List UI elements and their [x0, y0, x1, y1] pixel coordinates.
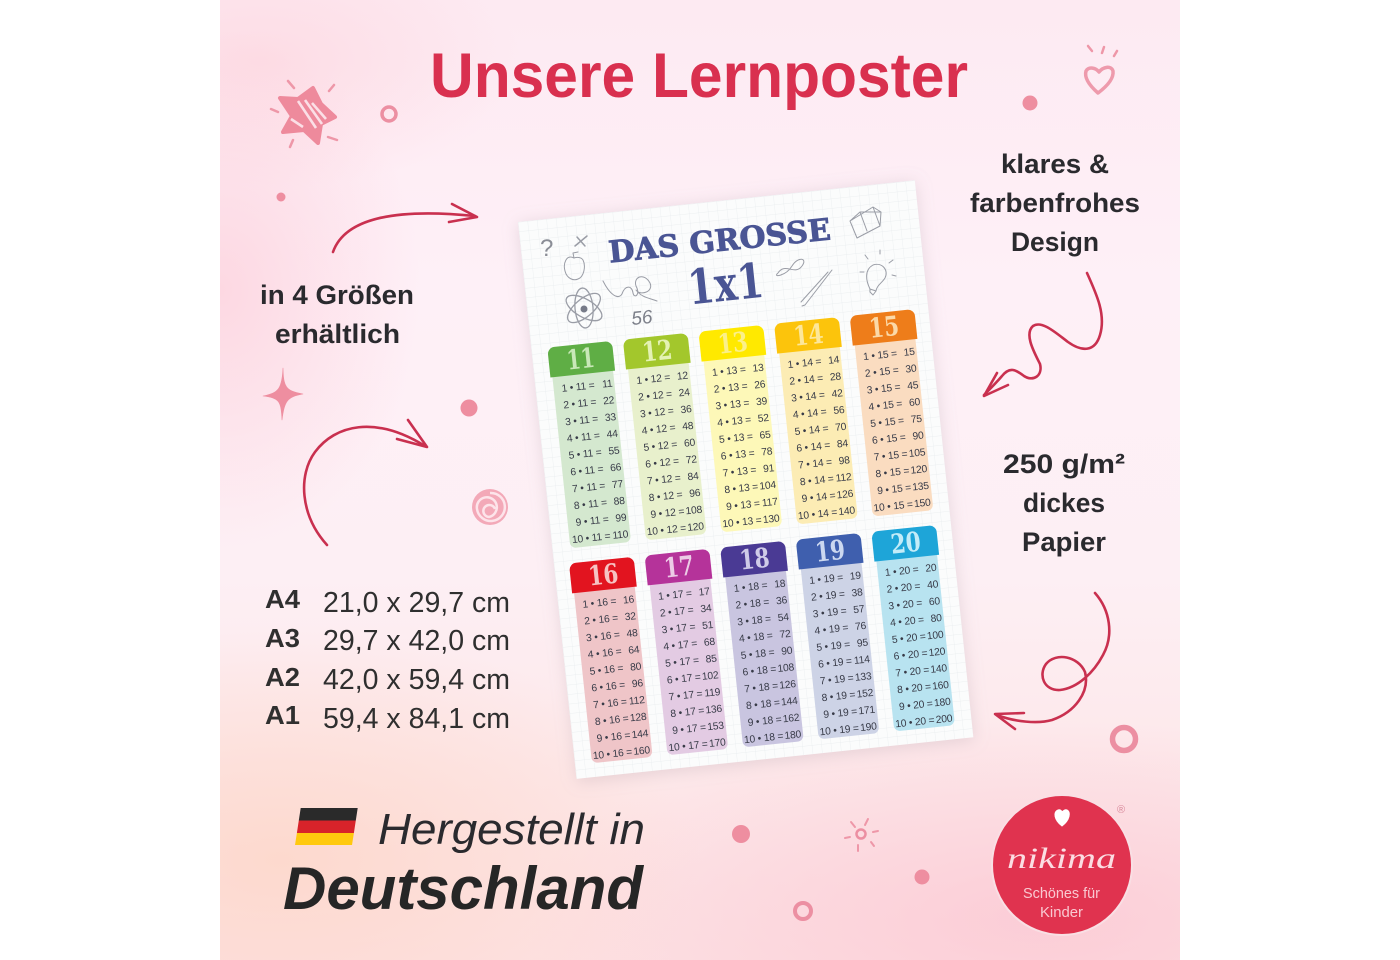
column 13: 6 • 13 =: [720, 448, 755, 463]
logo: nikima: Kinder: [1040, 905, 1083, 921]
column 13: 10 • 13 =: [722, 515, 762, 530]
column 11: 88: [613, 496, 626, 508]
column 17: 51: [702, 620, 714, 632]
column 13: 3 • 13 =: [715, 398, 750, 413]
text: in 4 Größen erhältlich: erhältlich: [275, 319, 400, 349]
icon: small ring: [382, 107, 396, 121]
column 19: 7 • 19 =: [819, 673, 854, 688]
doodle: atom: [562, 287, 606, 329]
column 17: 17: [698, 586, 711, 599]
column 15: 9 • 15 =: [877, 483, 912, 497]
column 18: 18: [738, 543, 771, 577]
column 16: 128: [629, 712, 647, 724]
column 17: 8 • 17 =: [670, 706, 705, 720]
column 12: 10 • 12 =: [646, 523, 687, 538]
column 12: 72: [685, 454, 698, 466]
column 16: 80: [630, 661, 642, 674]
column 17: 119: [704, 687, 721, 700]
column 14: 56: [833, 405, 846, 417]
arrow: top left: [333, 204, 477, 252]
column 15: 120: [910, 464, 928, 477]
column 19: 19: [814, 535, 847, 569]
column 12: 120: [687, 521, 705, 534]
column 11: 5 • 11 =: [568, 447, 602, 462]
column 11: 4 • 11 =: [566, 431, 601, 445]
column 16: 48: [626, 628, 639, 640]
column 19: 10 • 19 =: [819, 723, 860, 738]
icon: sun: [845, 819, 878, 851]
column 18: 7 • 18 =: [744, 681, 779, 695]
column 15: 7 • 15 =: [873, 449, 908, 464]
column 13: 130: [762, 513, 780, 526]
column 14: 5 • 14 =: [794, 424, 829, 438]
icon: ring: [795, 903, 811, 919]
column 18: 5 • 18 =: [740, 647, 775, 662]
column 19: 3 • 19 =: [812, 606, 847, 620]
column 18: 1 • 18 =: [733, 580, 768, 595]
column 13: 65: [759, 430, 772, 442]
text: poster sizes: A2: [265, 662, 300, 692]
text: 250 g/m² dickes Papier: 250 g/m²: [1003, 449, 1125, 479]
column 13: 9 • 13 =: [726, 499, 761, 513]
column 11: 8 • 11 =: [573, 498, 608, 512]
icon: german flag: [295, 808, 358, 845]
column 11: 44: [606, 429, 619, 441]
column 20: 180: [933, 697, 952, 709]
column 18: 108: [777, 662, 795, 675]
column 14: 2 • 14 =: [789, 373, 824, 388]
column 16: 9 • 16 =: [596, 730, 631, 745]
column 19: 171: [858, 705, 876, 717]
logo: nikima: Schönes für: [1023, 886, 1100, 902]
column 17: 4 • 17 =: [663, 639, 698, 653]
column 18: 144: [781, 696, 799, 709]
text: klares und farbenfrohes Design: Design: [1011, 227, 1099, 257]
column 16: 16: [623, 594, 635, 607]
text: poster sizes: 59,4 x 84,1 cm: [323, 703, 510, 735]
arrow: wavy: [984, 273, 1102, 396]
column 18: 54: [777, 612, 790, 624]
column 11: 110: [612, 529, 629, 542]
poster title: [607, 212, 838, 324]
column 13: 104: [759, 480, 777, 493]
column 13: 78: [761, 446, 773, 458]
column 14: 112: [835, 472, 853, 485]
column 14: 126: [836, 489, 854, 501]
text: in 4 Größen erhältlich: in 4 Größen: [260, 280, 414, 310]
column 19: 5 • 19 =: [816, 640, 851, 654]
column 15: 90: [912, 430, 925, 443]
column 12: 12: [641, 335, 674, 369]
column 11: 77: [611, 479, 624, 491]
column 20: 60: [928, 596, 941, 608]
column 13: 13: [752, 363, 765, 375]
column 19: 38: [851, 587, 864, 599]
column 17: 170: [708, 737, 727, 750]
doodle: infinity: [777, 259, 804, 276]
column 16: 64: [628, 645, 640, 657]
doodle: number 56: 56: [630, 307, 654, 330]
column 20: 100: [926, 630, 945, 642]
column 12: 24: [678, 387, 691, 399]
column 19: 133: [854, 671, 872, 684]
column 11: [547, 341, 633, 549]
column 16: 32: [624, 611, 637, 623]
arrow: loop: [995, 593, 1109, 729]
column 17: 7 • 17 =: [668, 689, 703, 703]
column 12: 3 • 12 =: [639, 406, 674, 420]
column 15: 6 • 15 =: [872, 432, 906, 447]
column 14: 14: [792, 319, 825, 353]
text: Deutschland: Deutschland: [283, 855, 644, 922]
column 20: 40: [927, 579, 939, 591]
column 11: 99: [615, 513, 628, 525]
column 18: 9 • 18 =: [747, 714, 782, 729]
text: in 4 Größen erhältlich: [260, 280, 414, 349]
logo: nikima: [992, 795, 1132, 935]
icon: spiral: [472, 489, 508, 525]
column 16: 3 • 16 =: [586, 630, 621, 644]
column 14: 140: [838, 505, 856, 518]
column 18: 3 • 18 =: [737, 614, 772, 628]
column 19: 9 • 19 =: [823, 707, 858, 721]
column 14: 10 • 14 =: [797, 507, 838, 522]
icon: dot: [732, 825, 750, 843]
icon: dot: [1022, 96, 1038, 110]
column 17: 153: [707, 721, 725, 733]
column 14: 1 • 14 =: [787, 357, 822, 371]
column 16: 2 • 16 =: [584, 613, 619, 628]
text: poster sizes: 21,0 x 29,7 cm: [323, 587, 510, 619]
column 16: 160: [633, 745, 651, 758]
text: 250 g/m² dickes Papier: dickes: [1023, 488, 1105, 518]
text: poster sizes: A3: [265, 623, 300, 653]
column 20: 4 • 20 =: [890, 615, 925, 629]
column 17: 68: [703, 637, 716, 649]
column 12: 1 • 12 =: [636, 372, 671, 387]
column 18: 36: [775, 595, 788, 607]
icon: dot: [276, 192, 286, 202]
column 15: 45: [907, 380, 919, 392]
column 14: 6 • 14 =: [796, 440, 831, 455]
poster shadow: [518, 182, 974, 782]
column 20: 160: [932, 680, 950, 693]
column 18: 8 • 18 =: [746, 698, 780, 712]
column 20: 6 • 20 =: [893, 648, 928, 663]
doodle: question mark and cross: [540, 235, 587, 262]
column 13: [698, 325, 784, 533]
column 12: 36: [680, 404, 693, 416]
column 13: 2 • 13 =: [713, 381, 748, 396]
column 14: 84: [836, 438, 849, 451]
column 17: 17: [662, 551, 696, 585]
column 15: 105: [908, 447, 926, 460]
column 13: 117: [761, 497, 779, 509]
column 14: 8 • 14 =: [799, 474, 834, 488]
text: poster sizes: A1: [265, 700, 300, 730]
column 11: 66: [610, 462, 622, 474]
column 18: 90: [781, 646, 793, 658]
column 19: 190: [860, 721, 878, 734]
doodle: scribble: [603, 277, 657, 301]
column 18: 180: [784, 729, 802, 742]
column 20: 7 • 20 =: [895, 665, 930, 680]
column 14: 7 • 14 =: [798, 457, 833, 472]
text: 250 g/m² dickes Papier: [1003, 449, 1125, 557]
column 18: 4 • 18 =: [739, 631, 773, 645]
column 12: 2 • 12 =: [638, 389, 673, 404]
logo: nikima: nikima: [1007, 842, 1116, 875]
column 13: 8 • 13 =: [724, 482, 759, 496]
column 14: 28: [829, 371, 842, 384]
column 16: 112: [628, 695, 646, 708]
text: Hergestellt in: Hergestellt in: [378, 805, 645, 854]
column 20: 20: [925, 563, 938, 575]
column 13: 52: [757, 413, 770, 425]
column 17: 1 • 17 =: [658, 588, 693, 603]
column 11: 22: [603, 395, 615, 407]
arrow: curved to the poster: [304, 420, 427, 545]
column 18: 18: [774, 579, 786, 591]
column 15: 5 • 15 =: [870, 416, 905, 430]
poster title: 1x1: [685, 253, 766, 316]
icon: doodle star: [271, 81, 337, 147]
text: poster sizes: [265, 584, 510, 735]
column 12: 60: [684, 438, 696, 450]
column 17: 102: [701, 670, 720, 683]
column 13: 1 • 13 =: [712, 365, 746, 379]
column 20: 140: [930, 663, 948, 676]
column 12: 4 • 12 =: [641, 423, 676, 437]
column 17: 3 • 17 =: [661, 622, 696, 636]
doodle: pencil: [801, 270, 832, 306]
column 14: [774, 317, 860, 525]
column 16: 6 • 16 =: [591, 680, 626, 695]
column 20: 1 • 20 =: [884, 565, 919, 579]
background panel: [220, 0, 1180, 960]
column 20: 9 • 20 =: [898, 699, 933, 713]
text: klares und farbenfrohes Design: klares &: [1001, 149, 1109, 179]
column 18: 126: [779, 679, 797, 692]
column 14: 42: [831, 388, 844, 400]
column 15: 60: [908, 397, 921, 409]
doodle: question mark and cross: ?: [540, 235, 553, 262]
column 15: 15: [903, 347, 916, 359]
column 18: 2 • 18 =: [735, 597, 770, 612]
column 16: 5 • 16 =: [589, 663, 624, 678]
column 15: 2 • 15 =: [864, 365, 899, 380]
column 20: 120: [928, 646, 946, 659]
column 18: 6 • 18 =: [742, 664, 777, 679]
column 20: 2 • 20 =: [886, 581, 921, 596]
title: Unsere Lernposter: [430, 41, 968, 111]
column 16: 8 • 16 =: [594, 714, 629, 728]
column 16: [569, 557, 655, 763]
column 13: 7 • 13 =: [722, 465, 757, 480]
column 14: 14: [828, 355, 840, 367]
column 19: 114: [853, 654, 871, 667]
column 16: 7 • 16 =: [593, 697, 628, 711]
column 12: [623, 333, 709, 541]
column 12: 8 • 12 =: [648, 490, 683, 504]
column 15: 3 • 15 =: [866, 382, 901, 397]
column 15: [850, 309, 935, 517]
column 14: 3 • 14 =: [791, 390, 826, 405]
column 15: 1 • 15 =: [863, 349, 898, 363]
column 19: 6 • 19 =: [818, 656, 853, 671]
column 20: 5 • 20 =: [891, 632, 926, 646]
column 13: 91: [763, 463, 775, 475]
column 15: 75: [910, 414, 923, 426]
column 17: 2 • 17 =: [659, 605, 694, 620]
column 11: 2 • 11 =: [563, 397, 597, 412]
column 18: 72: [779, 629, 792, 641]
icon: heart with rays: [1086, 46, 1117, 93]
column 20: 3 • 20 =: [888, 598, 923, 613]
column 16: 16: [587, 559, 620, 592]
column 20: 80: [930, 613, 943, 625]
icon: big ring: [1112, 728, 1136, 750]
column 17: 9 • 17 =: [672, 722, 707, 737]
column 19: 95: [856, 638, 869, 650]
text: 250 g/m² dickes Papier: Papier: [1022, 527, 1106, 557]
column 11: 33: [604, 412, 617, 424]
column 15: 150: [914, 497, 932, 510]
column 15: 15: [868, 311, 901, 345]
column 11: 11: [565, 343, 596, 377]
column 19: 4 • 19 =: [814, 623, 849, 637]
column 13: 5 • 13 =: [719, 432, 754, 446]
column 20: 8 • 20 =: [897, 682, 932, 696]
column 11: 7 • 11 =: [572, 481, 606, 495]
column 16: 10 • 16 =: [592, 747, 633, 762]
column 14: 4 • 14 =: [792, 407, 827, 421]
column 17: 6 • 17 =: [666, 672, 701, 687]
text: poster sizes: A4: [265, 584, 301, 614]
column 19: 8 • 19 =: [821, 690, 856, 704]
column 18: [720, 541, 806, 748]
column 19: 2 • 19 =: [811, 589, 846, 604]
icon: dot: [460, 400, 478, 416]
poster: Das grosse 1x1: [518, 180, 973, 779]
column 17: 85: [705, 653, 718, 666]
column 16: 1 • 16 =: [582, 596, 617, 611]
column 19: [796, 533, 881, 740]
column 12: 12: [676, 371, 689, 383]
poster doodles: [540, 207, 896, 330]
column 15: 8 • 15 =: [875, 466, 910, 480]
column 13: 4 • 13 =: [717, 415, 752, 429]
column 12: 84: [687, 471, 700, 483]
column 11: 11: [602, 378, 613, 391]
column 12: 9 • 12 =: [650, 507, 685, 521]
column 11: 55: [608, 446, 621, 458]
column 12: 48: [682, 421, 694, 433]
column 19: 152: [856, 688, 874, 701]
doodle: apple: [564, 252, 584, 280]
column 18: 162: [782, 713, 800, 725]
column 13: 39: [756, 396, 768, 408]
poster title: DAS GROSSE: [607, 212, 832, 271]
column 15: 135: [912, 481, 930, 494]
column 20: 20: [889, 527, 922, 561]
column 17: 34: [700, 603, 713, 615]
column 12: 7 • 12 =: [647, 473, 681, 487]
text: klares und farbenfrohes Design: farbenfrohes: [970, 188, 1140, 218]
text: poster sizes: 29,7 x 42,0 cm: [323, 625, 510, 657]
column 20: 200: [935, 713, 953, 726]
column 20: [871, 525, 957, 732]
column 17: 5 • 17 =: [665, 655, 700, 670]
column 16: 144: [631, 728, 649, 741]
column 11: 3 • 11 =: [565, 414, 599, 428]
column 19: 57: [853, 604, 865, 616]
column 12: 108: [685, 505, 703, 517]
column 20: 10 • 20 =: [895, 715, 935, 730]
column 16: 4 • 16 =: [587, 647, 622, 661]
column 17: 10 • 17 =: [668, 739, 708, 754]
column 11: 9 • 11 =: [575, 514, 609, 529]
column 12: 96: [689, 488, 701, 500]
doodle: light bulb: [860, 250, 896, 295]
column 17: [645, 549, 730, 755]
column 19: 1 • 19 =: [809, 572, 844, 587]
doodle: cube: [850, 207, 881, 238]
column 18: 10 • 18 =: [744, 731, 784, 746]
column 12: 5 • 12 =: [643, 439, 678, 454]
column 19: 76: [855, 621, 867, 633]
registered mark: ®: [1117, 804, 1125, 816]
text: poster sizes: 42,0 x 59,4 cm: [323, 664, 510, 696]
column 11: 1 • 11 =: [561, 380, 595, 395]
column 15: 4 • 15 =: [868, 399, 903, 413]
column 17: 136: [705, 704, 723, 716]
column 14: 9 • 14 =: [801, 491, 836, 505]
icon: dot: [914, 870, 930, 884]
column 11: 6 • 11 =: [570, 464, 604, 479]
text: klares und farbenfrohes Design: [970, 149, 1140, 257]
column 11: 10 • 11 =: [571, 531, 611, 546]
column 12: 6 • 12 =: [645, 456, 680, 471]
column 19: 19: [849, 571, 862, 583]
column 15: 10 • 15 =: [873, 499, 913, 514]
column 13: 26: [754, 379, 766, 391]
column 16: 96: [631, 678, 644, 690]
column 13: 13: [716, 327, 749, 361]
icon: sparkle: [263, 368, 303, 420]
column 14: 98: [838, 455, 851, 467]
column 14: 70: [835, 422, 847, 434]
column 15: 30: [905, 363, 918, 376]
